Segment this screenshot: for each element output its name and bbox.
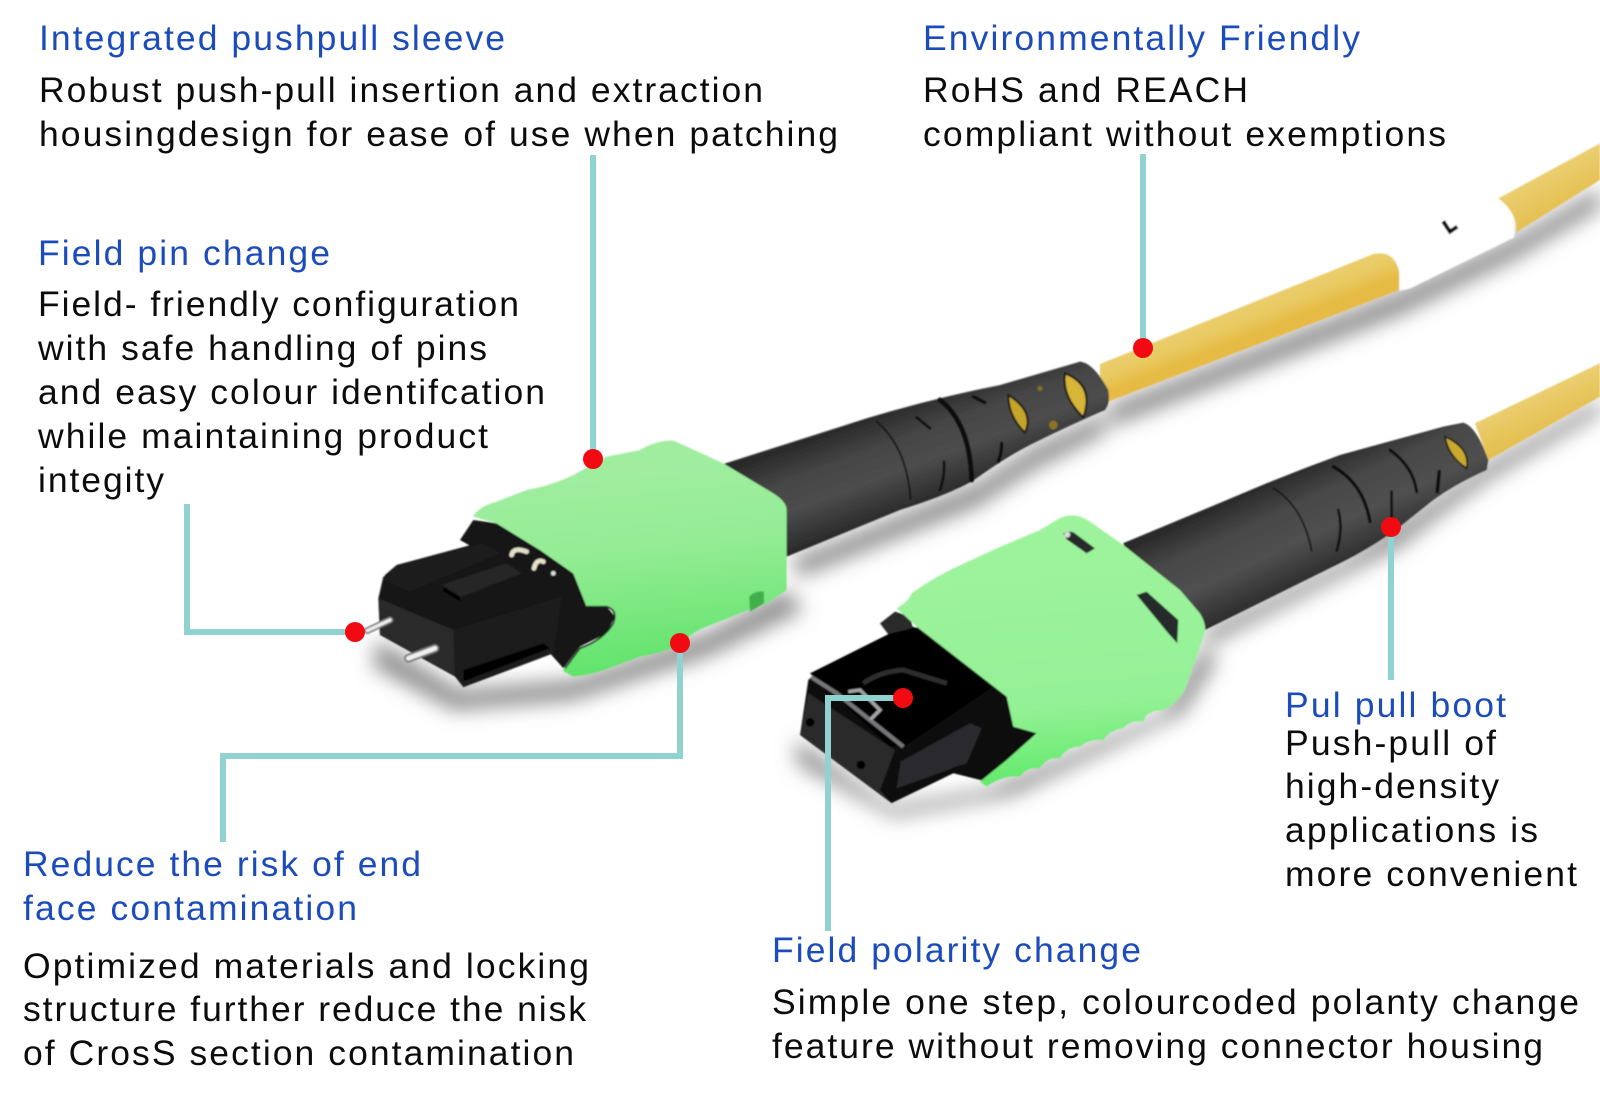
contacts [512,550,527,555]
description: Simple one step, colourcoded polanty change [772,982,1579,1022]
description: more convenient [1285,854,1577,894]
description [39,70,838,154]
description: while maintaining product [37,416,488,456]
leader: field pin change [187,504,365,642]
cable: lower yellow fibre [1475,363,1600,460]
panel: integrated pushpull sleeve [39,18,838,154]
description [1285,723,1577,894]
description: and easy colour identifcation [38,372,545,412]
label mark [1443,222,1457,232]
leader: environmentally friendly [1133,154,1153,358]
description: high-density [1285,766,1499,806]
panel: reduce the risk of end face contamination [23,844,589,1073]
panel: field polarity change [772,930,1579,1066]
panel: pull boot [1285,685,1577,894]
description: applications is [1285,810,1538,850]
description [772,982,1579,1066]
product photo: two fibre connectors [367,143,1600,817]
connector: lower, black ferrule [800,612,1038,803]
description: RoHS and REACH [923,70,1248,110]
description: feature without removing connector housing [772,1026,1543,1066]
description: integity [38,460,164,500]
description: of CrosS section contamination [23,1033,574,1073]
connector: upper, black ferrule with pins [367,520,615,687]
description [923,70,1446,154]
description: housingdesign for ease of use when patching [39,114,838,154]
boot: upper connector [720,362,1109,557]
heading: Integrated pushpull sleeve [39,18,505,58]
drop shadows [373,188,1600,817]
description [37,284,545,500]
leader: pull boot [1381,517,1401,680]
heading: face contamination [23,888,357,928]
heading: Field polarity change [772,930,1141,970]
leader: integrated pushpull sleeve [583,155,603,469]
panel: field pin change [37,233,545,500]
heading [23,844,421,928]
description [23,946,589,1073]
description: Robust push-pull insertion and extraction [39,70,763,110]
panel: environmentally friendly [923,18,1446,154]
sleeve: lower, green housing [897,515,1205,787]
pins [367,620,390,631]
boot: lower connector [1123,423,1488,630]
description: Push-pull of [1285,723,1496,763]
heading: Environmentally Friendly [923,18,1360,58]
description: Optimized materials and locking [23,946,589,986]
sleeve: upper, green housing [473,441,787,677]
description: compliant without exemptions [923,114,1446,154]
cable: upper yellow fibre with white label [1100,143,1600,407]
heading: Reduce the risk of end [23,844,421,884]
heading: Field pin change [38,233,330,273]
leader: field polarity change [828,688,913,931]
description: Field- friendly configuration [38,284,519,324]
description: structure further reduce the nisk [23,989,586,1029]
leader: reduce contamination [223,633,690,842]
description: with safe handling of pins [37,328,487,368]
heading: Pul pull boot [1285,685,1506,725]
